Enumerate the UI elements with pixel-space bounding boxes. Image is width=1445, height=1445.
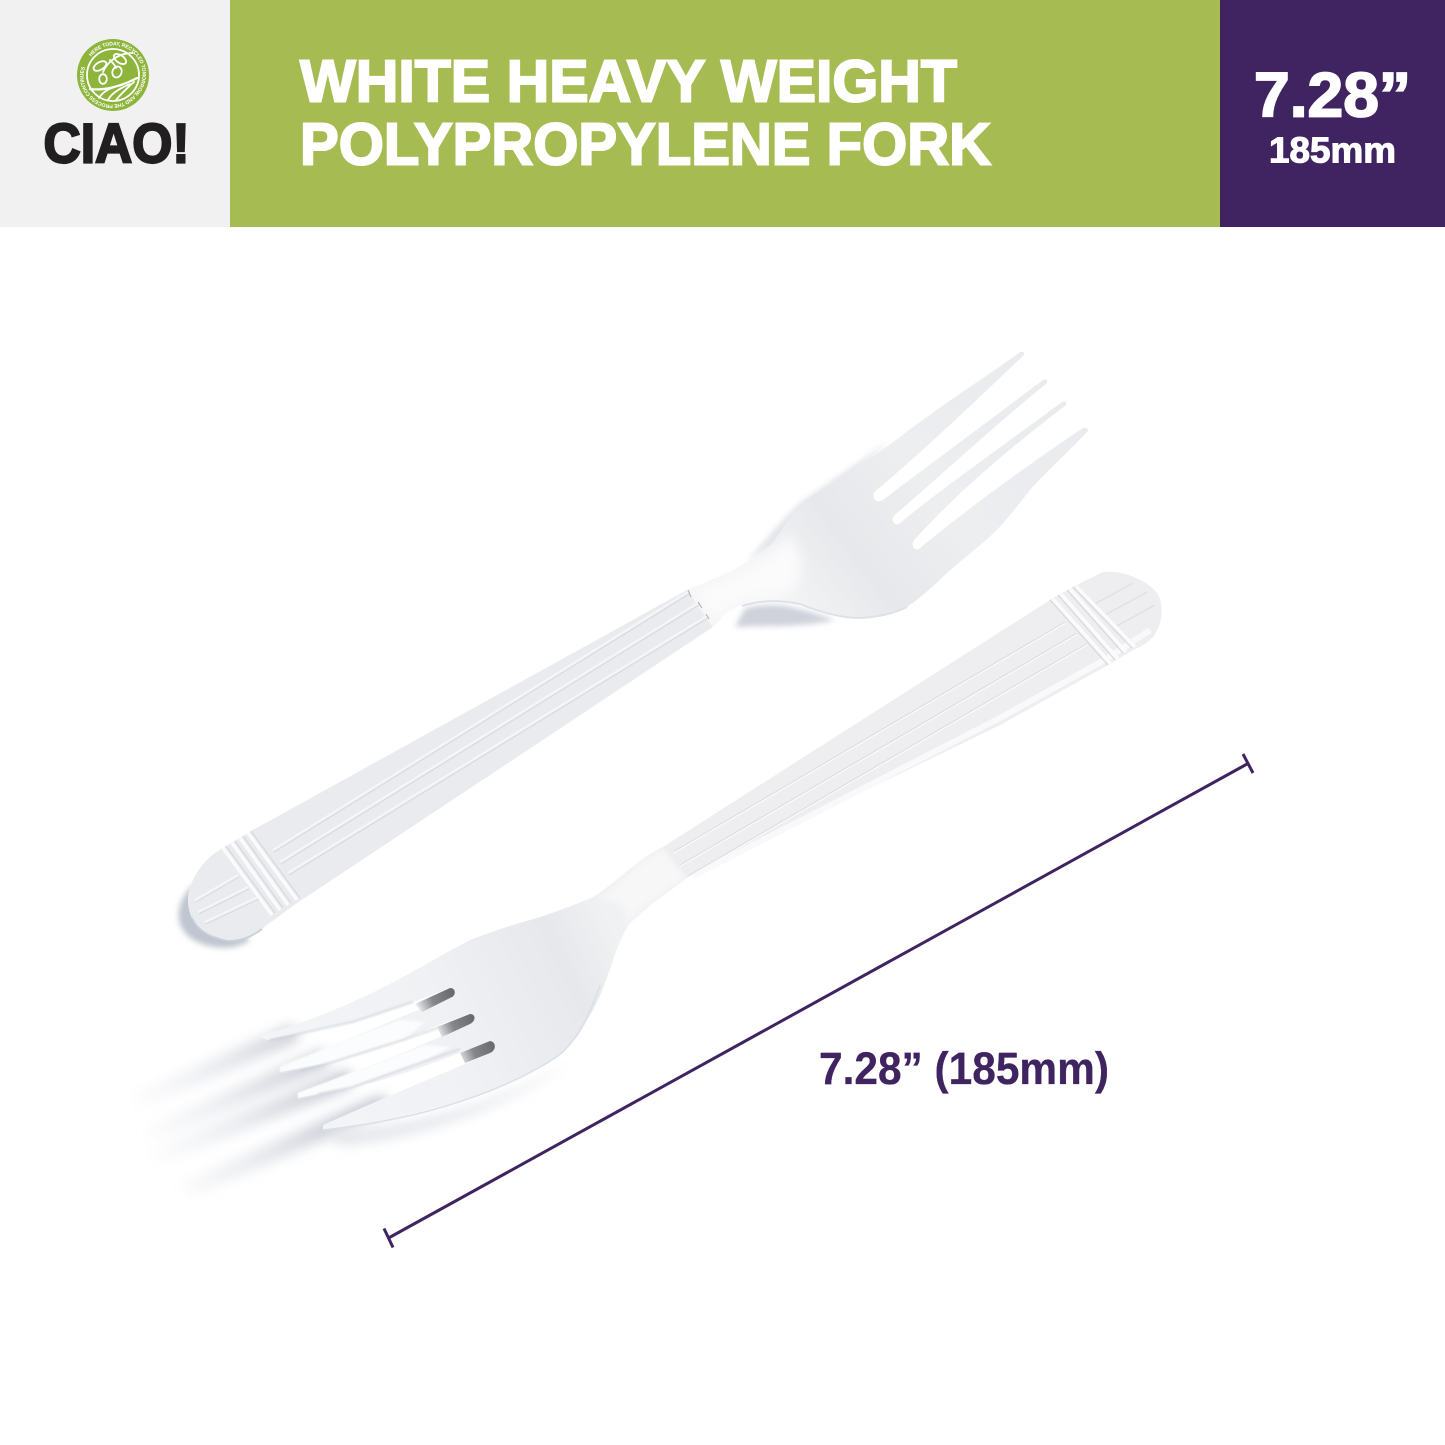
panel: size <box>1220 0 1445 227</box>
head highlight <box>695 535 800 620</box>
fork body <box>188 352 1088 940</box>
head rim <box>742 601 907 618</box>
tine shadows <box>140 1035 380 1187</box>
handle end rim <box>192 918 262 941</box>
fork shadows <box>178 440 890 948</box>
neck highlight <box>600 850 685 925</box>
handle ribs <box>673 583 1155 877</box>
head rim <box>323 985 600 1130</box>
title line 2: POLYPROPYLENE FORK <box>300 112 991 178</box>
size in inches: 7.28” <box>1254 60 1411 130</box>
panel: logo <box>0 0 230 227</box>
fork body <box>258 572 1162 1130</box>
middle tines <box>280 1020 450 1098</box>
tine slots <box>415 988 495 1063</box>
dimension arrow <box>384 754 1253 1248</box>
handle ribs <box>195 590 709 924</box>
upper fork <box>178 352 1088 948</box>
header band <box>0 0 1445 227</box>
panel: title <box>230 0 1220 227</box>
icon: recycled badge with olive branch: HERE TODAY, RECYCLED TOMORROW, AND THE PROCESS CONTINUES <box>80 42 146 108</box>
logo wordmark: CIAO! <box>44 112 190 174</box>
handle tone <box>188 590 713 940</box>
size in millimetres: 185mm <box>1269 130 1396 170</box>
handle tone <box>663 572 1162 878</box>
tine edge shading <box>270 1002 460 1094</box>
lower fork <box>140 572 1162 1187</box>
title line 1: WHITE HEAVY WEIGHT <box>300 48 957 114</box>
head shadow <box>325 1062 570 1145</box>
dimension label: 7.28” (185mm) <box>819 1043 1109 1094</box>
handle bevel <box>693 630 1150 876</box>
